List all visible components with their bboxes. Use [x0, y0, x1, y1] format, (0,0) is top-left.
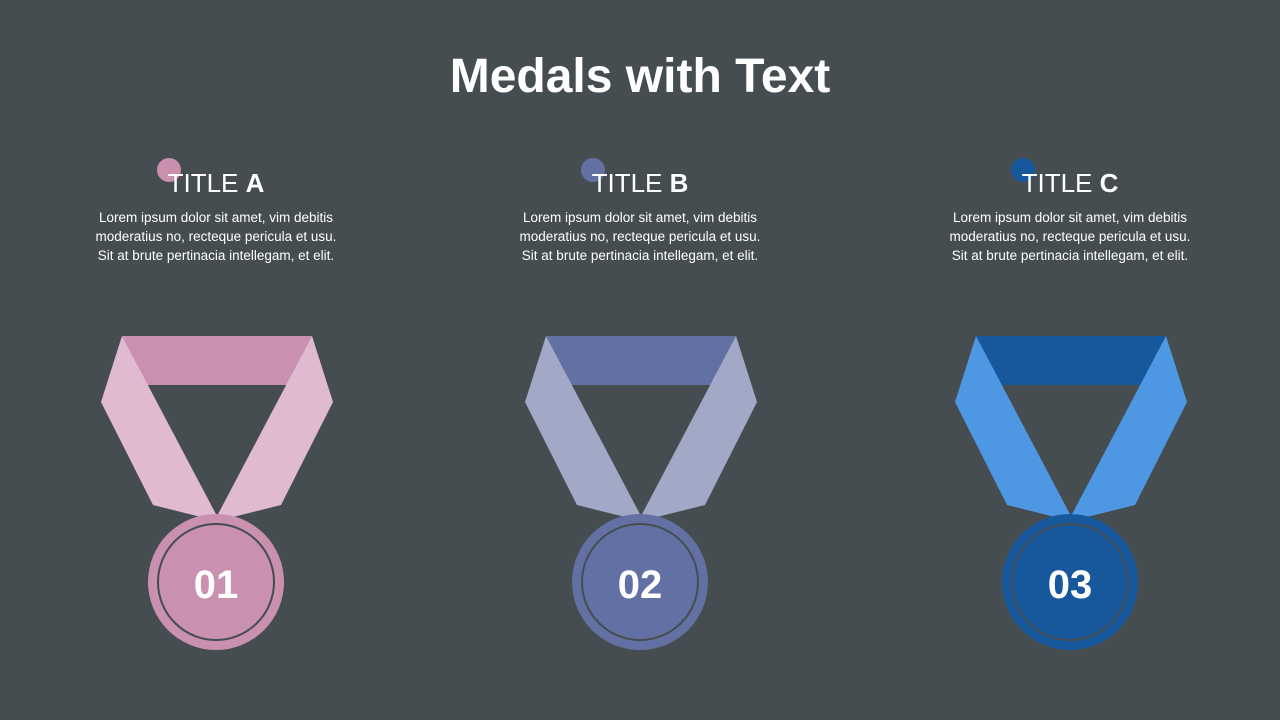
- text C: Sit at brute pertinacia intellegam, et elit.: [952, 248, 1188, 263]
- text B: [520, 210, 760, 263]
- medal B: 02: [618, 563, 662, 607]
- medal C: 03: [1048, 563, 1092, 607]
- medal C: [955, 336, 1187, 650]
- text B: Sit at brute pertinacia intellegam, et elit.: [522, 248, 758, 263]
- medal B: [525, 336, 757, 650]
- heading B: TITLE B: [592, 168, 688, 198]
- text B: moderatius no, recteque pericula et usu.: [520, 229, 760, 244]
- title: Medals with Text: [450, 50, 830, 103]
- panel: title B: [520, 158, 760, 263]
- panel: title A: [96, 158, 336, 263]
- text C: moderatius no, recteque pericula et usu.: [950, 229, 1190, 244]
- panel: title C: [950, 158, 1190, 263]
- text A: moderatius no, recteque pericula et usu.: [96, 229, 336, 244]
- text A: Lorem ipsum dolor sit amet, vim debitis: [99, 210, 333, 225]
- icon: dot C: [1011, 158, 1035, 182]
- heading A: TITLE A: [168, 168, 264, 198]
- medal A: [101, 336, 333, 650]
- medal A: 01: [194, 563, 238, 607]
- text A: Sit at brute pertinacia intellegam, et elit.: [98, 248, 334, 263]
- text C: Lorem ipsum dolor sit amet, vim debitis: [953, 210, 1187, 225]
- text C: [950, 210, 1190, 263]
- text A: [96, 210, 336, 263]
- heading C: TITLE C: [1022, 168, 1118, 198]
- text B: Lorem ipsum dolor sit amet, vim debitis: [523, 210, 757, 225]
- icon: dot B: [581, 158, 605, 182]
- icon: dot A: [157, 158, 181, 182]
